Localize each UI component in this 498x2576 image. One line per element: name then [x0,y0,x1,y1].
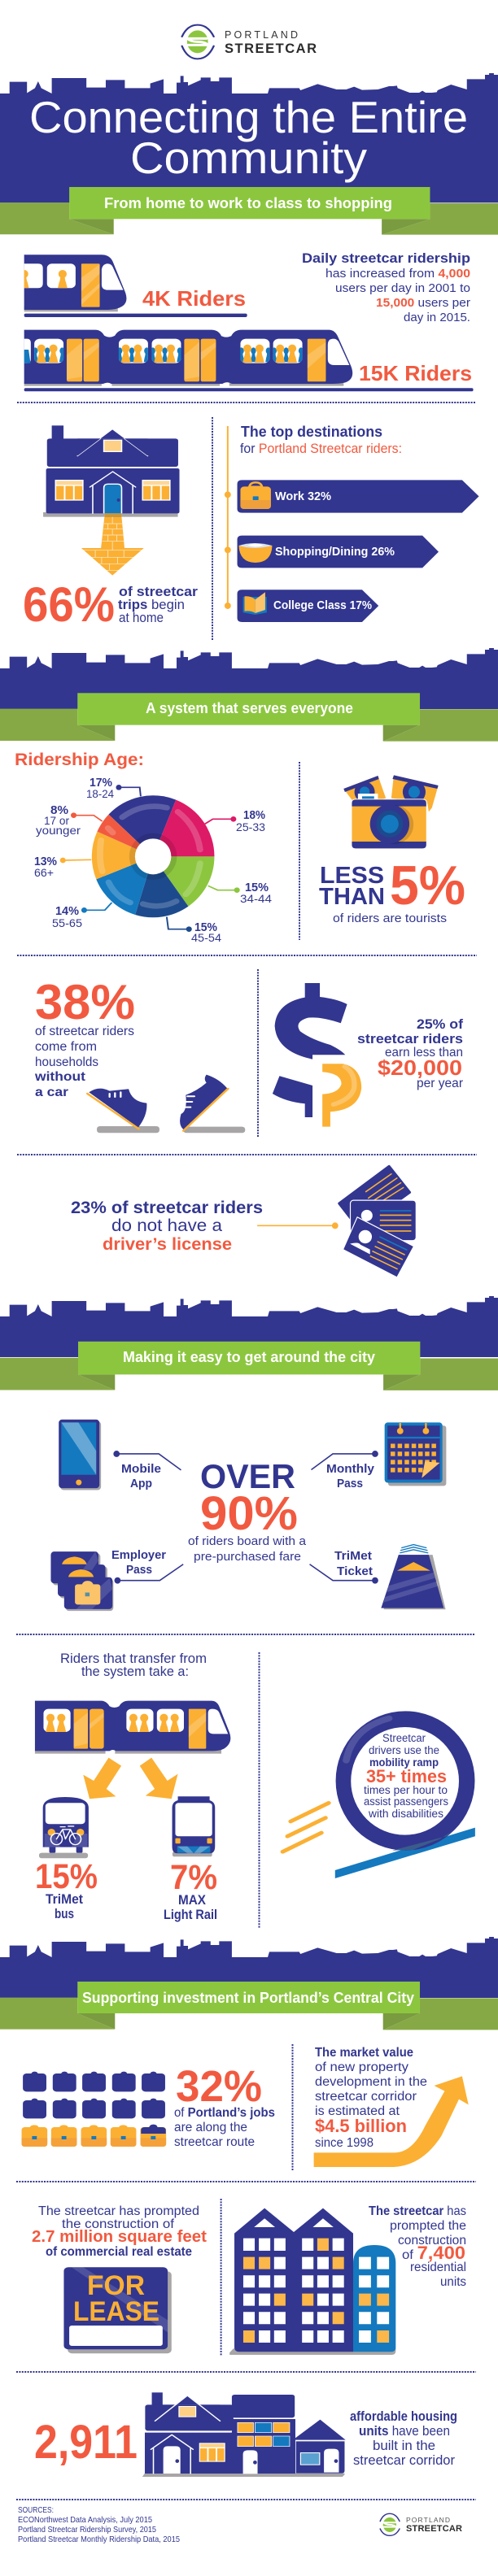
bar: shopping/dining 26%: Shopping/Dining 26% [275,545,395,559]
text [369,2204,466,2289]
text: streetcar corridor [353,2453,456,2468]
icon: row of houses [142,2392,346,2477]
text: 2.7 million square feet [32,2228,207,2246]
text: 23% of streetcar riders [71,1199,263,1217]
logo: Portland Streetcar [182,25,317,59]
option labels: Pass [337,1477,363,1490]
text: residential [410,2261,466,2274]
icon: apartment buildings [229,2208,395,2355]
stat: 66%: 66% [23,577,115,632]
text: streetcar route [174,2135,255,2149]
stat: less than 5% [319,855,465,925]
option labels: Mobile [121,1462,161,1476]
text: streetcar corridor [315,2090,417,2104]
bar: work 32%: Work 32% [275,490,331,503]
text: are along the [174,2121,247,2134]
text: come from [35,1040,97,1054]
logo mark [182,25,214,59]
panel: commercial real estate [32,2204,207,2353]
text: The market value [315,2046,413,2060]
labels: 66+ [34,867,54,879]
heading: for Portland Streetcar riders: [240,442,402,456]
bar: work 32% [238,480,479,513]
option labels: Monthly [326,1462,375,1476]
text: a car [35,1086,68,1099]
sources: ECONorthwest Data Analysis, July 2015 [18,2515,152,2525]
text: of 7,400 [402,2243,465,2263]
text: of commercial real estate [46,2245,192,2259]
text: streetcar riders [357,1031,463,1046]
stat: 66%: at home [119,610,164,625]
ribbon subtitle: From home to work to class to shopping [104,194,392,211]
text: Riders that transfer from [60,1651,207,1666]
panel: ridership growth [20,251,474,391]
text: of Portland’s jobs [174,2106,275,2120]
text: daily ridership: users per day in 2001 to [335,282,470,295]
stat: 15% TriMet bus: TriMet [46,1892,83,1907]
labels: 17% [90,776,112,790]
labels: 55-65 [52,917,82,929]
stat: less than 5%: of riders are tourists [333,912,447,925]
logo wordmark [225,29,317,56]
footer logo mark [380,2513,400,2535]
text [357,1016,463,1090]
heading: Ridership Age: [15,751,144,769]
ribbon [0,693,498,742]
text: the construction of [62,2217,175,2231]
section banner: supporting investment: Supporting investment in Portland’s Central City [82,1989,415,2006]
text: affordable housing [350,2409,457,2424]
text: times per hour to [364,1784,448,1796]
text: units have been [359,2424,450,2439]
skyline [0,648,498,709]
text: The streetcar has [369,2204,466,2218]
labels: 34-44 [240,893,273,905]
donut chart [92,795,214,917]
sources: SOURCES: [18,2505,54,2515]
stat: over 90% [188,1457,307,1564]
ribbon [0,1982,498,2030]
text: 35+ times [366,1766,447,1786]
stat: over 90%: of riders board with a [188,1535,307,1548]
text: $20,000 [378,1055,462,1080]
stat: 32%: 32% [176,2062,262,2111]
text [34,1025,134,1099]
text [174,2106,275,2149]
labels: 18% [243,808,265,822]
icon: TriMet ticket [381,1545,446,1609]
text: units [440,2275,466,2289]
icon: rising arrow [314,2076,469,2167]
section banner: supporting investment [0,1937,498,2030]
logo wordmark: STREETCAR [225,41,317,56]
labels: 17 or [44,815,69,827]
footer logo [380,2513,462,2535]
text: built in the [373,2439,435,2453]
panel: income [273,983,463,1127]
stat: less than 5%: LESS [320,863,384,889]
leader lines [60,785,240,932]
panel: ridership age [15,751,273,944]
option labels [111,1462,375,1578]
panel: households without a car [34,975,245,1133]
icon: briefcase [240,482,271,509]
panel: pre-purchased fares [50,1420,446,1611]
labels: 25-33 [236,821,265,833]
icon grid: briefcases [22,2072,166,2147]
section banner: making it easy: Making it easy to get around the city [123,1348,376,1365]
stat: 7% MAX light rail: MAX [178,1893,206,1908]
sources: Portland Streetcar Monthly Ridership Data, 2015 [18,2535,180,2544]
train: 15K riders [24,330,474,391]
labels: 13% [34,855,57,868]
header banner [0,73,498,235]
icon: house [43,425,180,517]
panel: trips begin at home [23,425,198,632]
panel: mobility ramp [282,1711,475,1878]
icon: bowl [239,543,272,563]
leader lines [113,1451,378,1584]
footer wordmark [406,2516,462,2534]
title [29,92,468,183]
heading [240,424,402,456]
text: households [35,1055,98,1069]
labels: 8% [50,803,68,817]
text: development in the [315,2075,427,2089]
icon: for lease sign [63,2267,172,2353]
skyline [0,1296,498,1357]
text: daily ridership: has increased from 4,000 [325,268,470,281]
bar: college class 17% [238,590,378,622]
sign text [73,2270,159,2327]
text: daily ridership [302,251,470,324]
connector [257,1222,339,1229]
stat: 15% TriMet bus: 15% [35,1857,98,1896]
text: since 1998 [315,2136,374,2150]
text: assist passengers [364,1795,448,1808]
panel: driver's license [71,1166,416,1277]
text: per year [417,1077,463,1090]
panel: market value [314,2046,469,2167]
stat: 2,911: 2,911 [34,2416,138,2469]
icon: MAX light rail [173,1796,215,1856]
stat: less than 5%: THAN [319,884,385,910]
text: the system take a: [81,1664,189,1679]
labels [34,776,273,944]
text [364,1732,448,1820]
sign board [63,2267,172,2353]
icon: dollar sign [273,983,361,1127]
labels: 15% [245,881,269,894]
option labels: Ticket [337,1564,373,1578]
option labels: Pass [126,1563,152,1577]
train: transfers [35,1701,230,1754]
panel: transfers [35,1651,230,1922]
labels: 45-54 [191,932,222,944]
bar: college class 17%: College Class 17% [273,598,372,612]
text: 25% of [417,1016,463,1032]
text: without [34,1070,85,1084]
text [350,2409,457,2468]
stat: over 90%: pre-purchased fare [194,1551,301,1564]
text: mobility ramp [369,1756,439,1769]
footer wordmark: PORTLAND [406,2516,450,2524]
text [32,2204,207,2259]
title: Connecting the Entire [29,92,468,142]
label: 4K riders: 4K Riders [142,286,246,311]
stat: 38%: 38% [35,975,135,1029]
panel: tourists [319,775,465,925]
panel: affordable housing [34,2392,457,2477]
stat: 15% TriMet bus [35,1857,98,1921]
text: daily ridership: day in 2015. [404,311,470,324]
icon: book [243,592,267,615]
labels: 18-24 [86,788,114,800]
heading: The top destinations [241,424,382,440]
labels: 14% [55,904,79,918]
icon: cameras [343,775,439,849]
sources: Portland Streetcar Ridership Survey, 2015 [18,2525,156,2535]
skyline background [0,73,498,202]
labels: younger [36,825,81,837]
icon: walking shoes [87,1075,245,1133]
skyline [0,1937,498,1998]
text: earn less than [385,1046,463,1060]
text: The streetcar has prompted [38,2204,199,2218]
section banner: a system that serves everyone [0,648,498,742]
ribbon [0,1342,498,1390]
footer wordmark: STREETCAR [406,2524,462,2534]
stat: 7% MAX light rail: 7% [170,1858,217,1897]
text: with disabilities [368,1808,443,1820]
text: of streetcar riders [35,1025,134,1038]
text [315,2046,427,2150]
text: drivers use the [369,1744,439,1756]
sources [18,2505,180,2544]
text: do not have a [111,1216,222,1235]
icon: ID cards [339,1166,416,1277]
text: prompted the [390,2219,466,2233]
icon: bus [39,1797,89,1858]
panel: residential units [229,2204,466,2355]
stat: over 90%: 90% [200,1487,298,1540]
train: 4K riders [20,255,247,317]
text: Streetcar [382,1732,426,1744]
icon: employer pass cards [50,1551,113,1611]
stat: over 90%: OVER [200,1457,295,1495]
option labels: App [130,1477,152,1490]
logo wordmark: PORTLAND [225,29,298,41]
sign text: FOR [87,2270,145,2301]
stat: 66%: trips begin [118,597,185,612]
text [60,1651,207,1679]
panel: top destinations [225,424,479,622]
green ribbon [0,187,498,235]
icon: calendar [385,1422,446,1486]
text: is estimated at [315,2104,400,2118]
stat: 15% TriMet bus: bus [55,1907,74,1921]
icon: mobile phone [59,1420,101,1490]
option labels: TriMet [334,1549,372,1563]
text: driver’s license [103,1235,232,1254]
section banner: making it easy [0,1296,498,1390]
label: 15K riders: 15K Riders [359,361,472,385]
text: construction [398,2234,466,2247]
sign text: LEASE [73,2296,159,2327]
stat: less than 5%: 5% [390,855,465,916]
panel: jobs along route [22,2062,275,2149]
timeline [225,426,231,609]
option labels: Employer [111,1548,166,1562]
stat: 66%: of streetcar [119,584,198,599]
text: daily ridership: 15,000 users per [376,297,470,310]
labels: 15% [194,920,217,934]
icon: wheel on ramp [282,1711,475,1878]
title: Community [130,133,368,183]
section banner: a system that serves everyone: A system that serves everyone [146,699,353,716]
arrows [83,1758,178,1799]
stat: 7% MAX light rail: Light Rail [164,1908,217,1922]
text: of new property [315,2060,408,2074]
text: daily ridership: Daily streetcar ridership [302,251,470,266]
text [71,1199,263,1254]
text: $4.5 billion [315,2116,407,2136]
arrow: brick walkway [81,513,144,576]
stat: 7% MAX light rail [164,1858,217,1922]
bar: shopping/dining 26% [238,536,439,568]
stat: 66% [23,577,198,632]
